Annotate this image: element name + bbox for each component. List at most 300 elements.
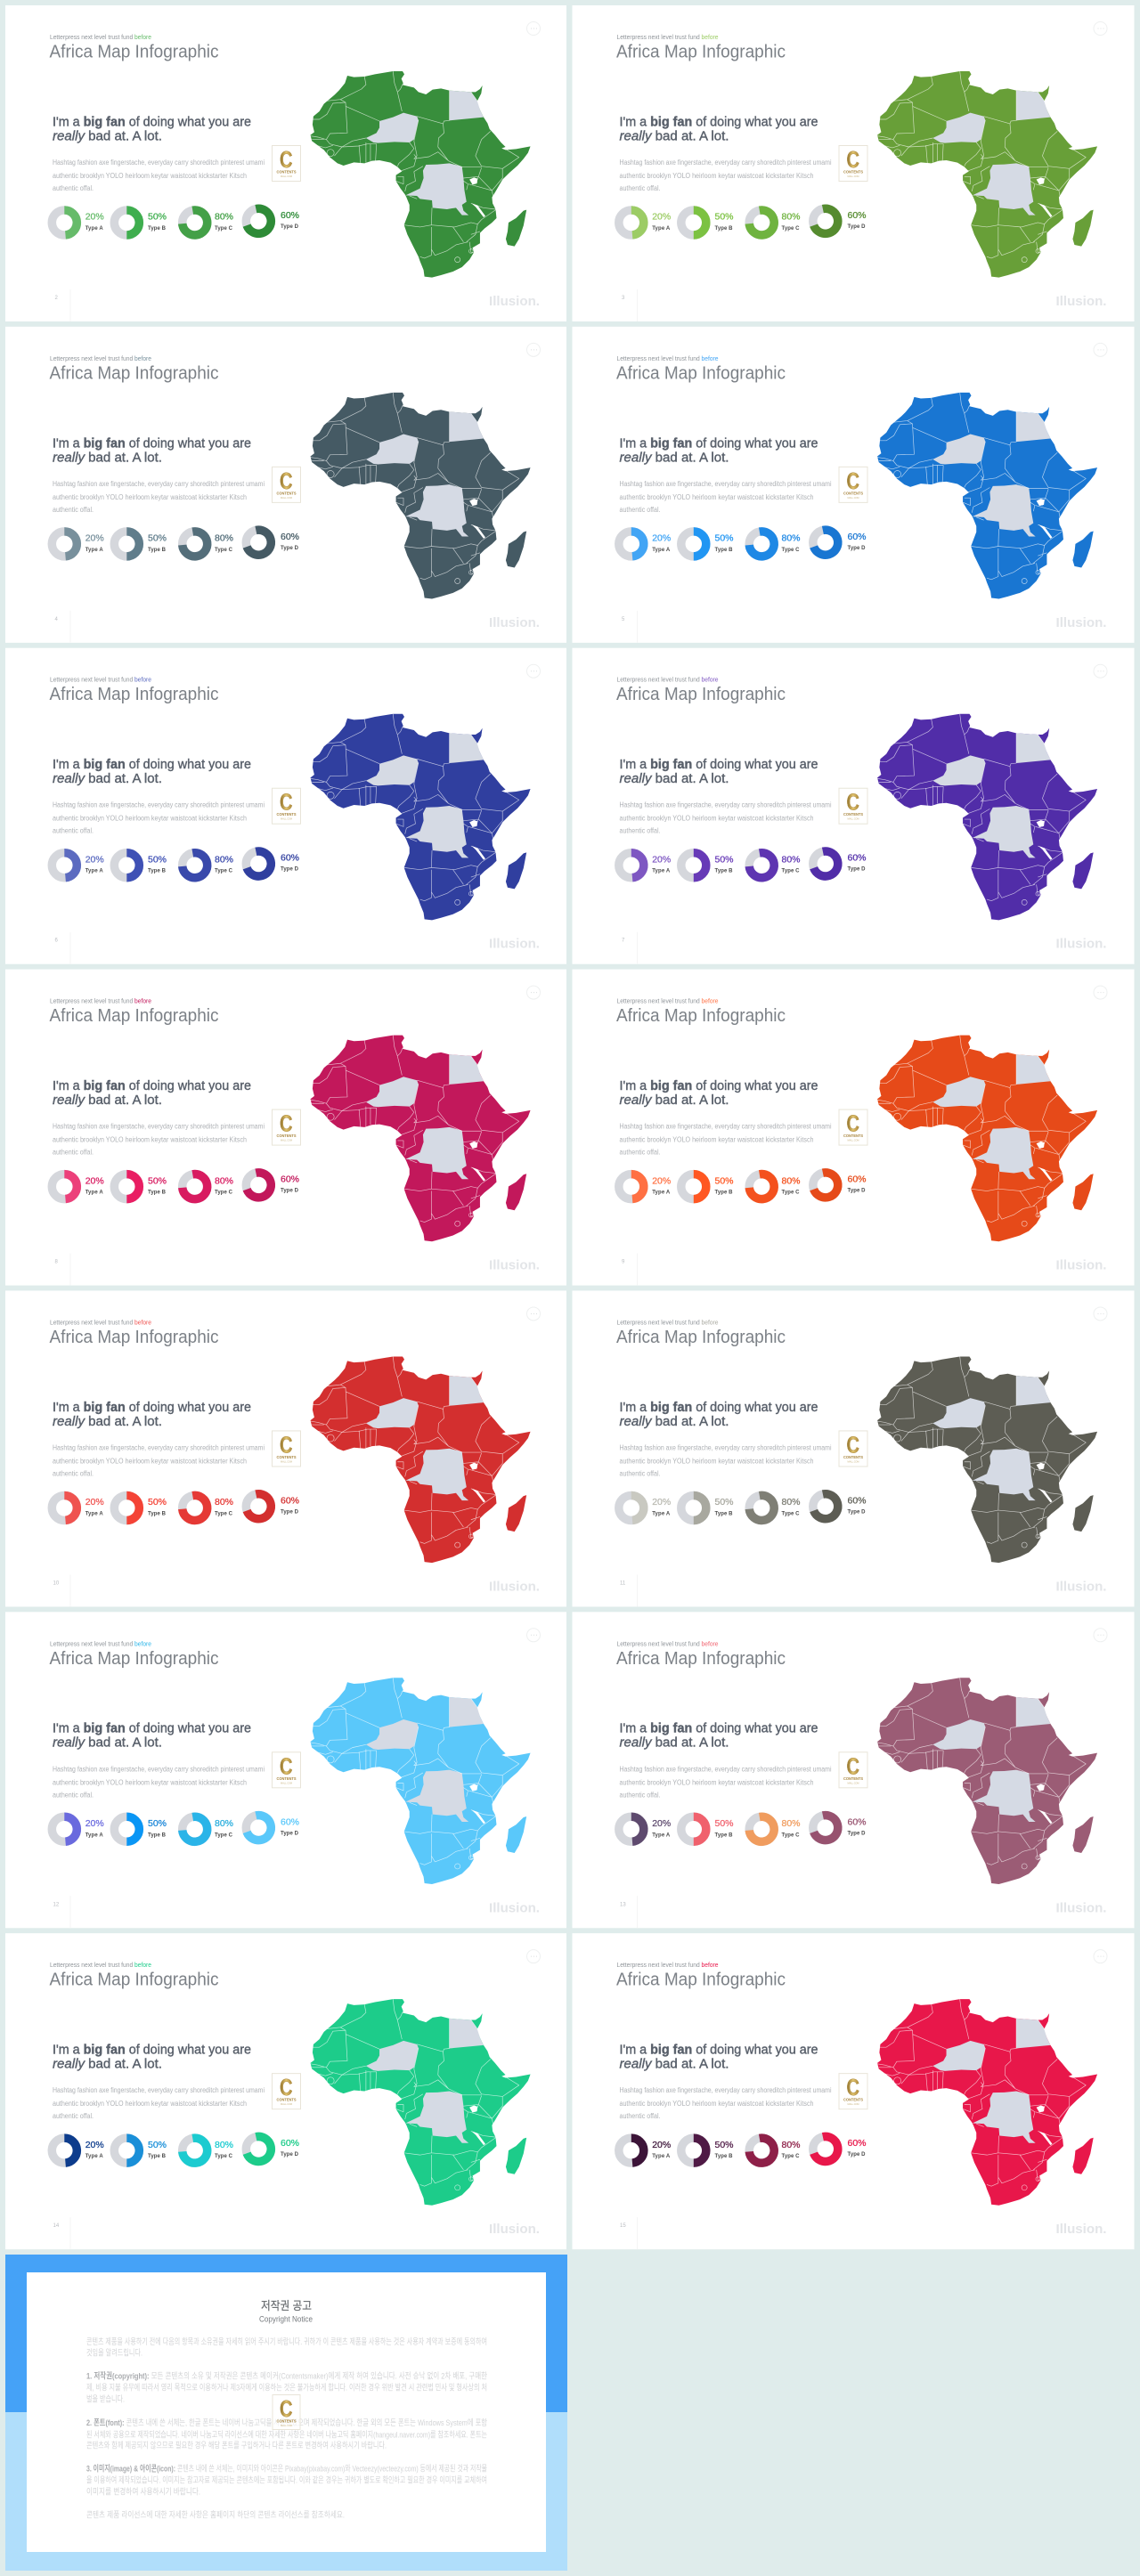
notice section 2 font: 콘텐츠와 함께 제공되지 않으므로 필요한 경우 해당 폰트를 구입하거나 다른 폰트로 변경하여 사용하시기 바랍니다.: [86, 2441, 387, 2451]
title: Africa Map Infographic: [616, 363, 786, 383]
headline: really bad at. A lot.: [620, 1414, 729, 1429]
donut: Type C: 80%: [215, 1175, 233, 1186]
donut: Type D: 60%: [281, 2138, 299, 2149]
donut: Type D: 60%: [281, 1174, 299, 1185]
body text: Hashtag fashion axe fingerstache, everyday carry shoreditch pinterest umami: [53, 1123, 265, 1131]
badge: contents logo: CONTENTS: [276, 1455, 296, 1459]
badge: contents logo: C: [846, 467, 859, 494]
donut: Type A: 20%: [652, 1497, 671, 1507]
badge: contents logo: [839, 146, 867, 182]
donut: Type A: Type A: [652, 1190, 671, 1196]
donut: Type A: [52, 1495, 104, 1520]
donut: Type C: 80%: [215, 2140, 233, 2150]
page number: 13: [620, 1902, 626, 1907]
notice section 1 copyright: 제, 비용 지불 유무에 따라서 영리 목적으로 이용하거나 제3자에게 이용하는 것은 불가능하게 합니다. 이러한 경우 위반 발견 시 관련법 민사 및 형사상의 처: [86, 2382, 487, 2393]
donut: Type B: [114, 210, 167, 235]
notice subheading: Copyright Notice: [259, 2315, 313, 2325]
subtitle: Letterpress next level trust fund before: [616, 354, 718, 362]
map: Africa: [311, 1356, 531, 1563]
body text: [620, 1443, 832, 1477]
badge: contents logo: [273, 2395, 300, 2429]
notice section 3 image and icon: 이미지를 변경하여 사용하시기 바랍니다.: [86, 2486, 200, 2497]
donut: Type D: 60%: [281, 1495, 299, 1506]
body text: authentic brooklyn YOLO heirloom keytar waistcoat kickstarter Kitsch: [620, 1778, 814, 1786]
donut: Type C: 80%: [215, 854, 233, 865]
page number: 5: [622, 617, 625, 622]
donut: Type C: [183, 2138, 233, 2163]
body text: [53, 1443, 265, 1477]
headline: [53, 2043, 251, 2072]
donut: Type D: [246, 208, 299, 233]
badge: contents logo: [839, 2074, 867, 2109]
badge: contents logo: C: [280, 467, 293, 494]
donut: Type C: Type C: [782, 2154, 800, 2159]
donut: Type A: [619, 532, 671, 557]
donut: Type D: Type D: [848, 224, 866, 230]
title: Africa Map Infographic: [50, 1649, 219, 1669]
badge: contents logo: CONTENTS: [276, 2098, 296, 2102]
donut: Type B: 50%: [148, 2140, 167, 2150]
donut: Type A: Type A: [86, 869, 103, 874]
donut: Type B: [681, 1495, 734, 1520]
title: Africa Map Infographic: [50, 363, 219, 383]
panel: slide 12 sky blue: [5, 1612, 566, 1928]
donut: Type C: Type C: [215, 2154, 233, 2159]
badge: contents logo: [273, 1109, 301, 1145]
badge: contents logo: [273, 1752, 301, 1788]
subtitle: Letterpress next level trust fund before: [50, 1639, 151, 1647]
headline: really bad at. A lot.: [620, 1735, 729, 1751]
badge: contents logo: CONTENTS: [276, 812, 296, 817]
panel: slide 14 teal green: [5, 1933, 566, 2249]
headline: [53, 1400, 251, 1429]
donut: Type A: [52, 210, 104, 235]
title: Africa Map Infographic: [50, 1006, 219, 1026]
badge: contents logo: C: [846, 2074, 859, 2101]
badge: contents logo: C: [280, 2395, 293, 2422]
donut: Type C: Type C: [782, 226, 800, 232]
icon: menu circle: [1094, 1307, 1107, 1321]
badge: contents logo: CONTENTS: [276, 1134, 296, 1138]
donut: Type C: [749, 210, 800, 235]
donut: Type A: 20%: [652, 212, 671, 223]
donut: Type A: 20%: [652, 1818, 671, 1829]
donut: Type B: [114, 1816, 167, 1841]
donut: Type C: Type C: [215, 226, 233, 232]
donut: Type C: [749, 853, 800, 878]
subtitle: Letterpress next level trust fund before: [616, 676, 718, 684]
donut: Type B: Type B: [714, 226, 733, 232]
body text: [620, 1765, 832, 1799]
brand: Illusion: Illusion.: [1056, 294, 1106, 309]
brand: Illusion: Illusion.: [1056, 937, 1106, 952]
donut: Type C: [183, 532, 233, 557]
body text: [53, 2086, 265, 2120]
body text: Hashtag fashion axe fingerstache, everyday carry shoreditch pinterest umami: [620, 801, 832, 809]
subtitle: Letterpress next level trust fund before: [616, 1639, 718, 1647]
icon: menu circle: [527, 343, 540, 356]
title: Africa Map Infographic: [50, 1971, 219, 1990]
notice section 3 image and icon: 을 이용하여 제작되었습니다. 이미지는 참고자료 제공되는 콘텐츠에는 포함됩니다. 이와 같은 경우는 귀하가 별도로 확인하고 필요한 경우 이미지를 교체하여: [86, 2475, 487, 2486]
donut: Type D: Type D: [281, 867, 299, 873]
headline: [620, 1078, 818, 1108]
headline: I'm a big fan of doing what you are: [620, 1400, 818, 1415]
headline: really bad at. A lot.: [53, 1735, 162, 1751]
brand: Illusion: Illusion.: [1056, 1579, 1106, 1594]
brand: Illusion: Illusion.: [489, 1579, 540, 1594]
panel: slide 3 light green: [572, 5, 1135, 321]
donut: Type D: [813, 2136, 866, 2161]
donut: Type B: [681, 1174, 734, 1199]
icon: menu circle: [1094, 664, 1107, 678]
badge: contents logo: CONTENTS: [276, 2418, 296, 2424]
map: Africa: [311, 393, 531, 599]
donut: Type A: [619, 1495, 671, 1520]
brand: Illusion: Illusion.: [489, 2222, 540, 2237]
subtitle: Letterpress next level trust fund before: [50, 33, 151, 41]
brand: Illusion: Illusion.: [489, 294, 540, 309]
donut: Type B: [681, 1816, 734, 1841]
donut: Type C: 80%: [215, 533, 233, 544]
badge: contents logo: C: [280, 1431, 293, 1458]
panel: slide 15 crimson: [572, 1933, 1135, 2249]
badge: contents logo: [839, 788, 867, 824]
donut: Type D: [246, 2136, 299, 2161]
body text: authentic brooklyn YOLO heirloom keytar waistcoat kickstarter Kitsch: [53, 1778, 247, 1786]
badge: contents logo: CONTENTS: [843, 812, 863, 817]
headline: I'm a big fan of doing what you are: [53, 2043, 251, 2058]
badge: contents logo: CONTENTS: [843, 491, 863, 495]
donut: Type A: 20%: [86, 212, 104, 223]
badge: contents logo: MALL.COM: [281, 2424, 292, 2427]
body text: authentic brooklyn YOLO heirloom keytar waistcoat kickstarter Kitsch: [53, 1136, 247, 1144]
panel: slide 7 purple: [572, 648, 1135, 964]
body text: authentic offal.: [53, 184, 94, 192]
headline: I'm a big fan of doing what you are: [53, 757, 251, 772]
body text: authentic brooklyn YOLO heirloom keytar waistcoat kickstarter Kitsch: [620, 815, 814, 823]
donut: Type D: Type D: [281, 1189, 299, 1194]
donut: Type A: Type A: [86, 1511, 103, 1516]
donut: Type D: Type D: [848, 867, 866, 873]
body text: authentic offal.: [620, 827, 661, 835]
donut: Type D: [246, 1816, 299, 1841]
subtitle: Letterpress next level trust fund before: [616, 33, 718, 41]
badge: contents logo: MALL.COM: [281, 1459, 292, 1463]
icon: menu circle: [527, 1950, 540, 1963]
notice closing line: 콘텐츠 제품 라이선스에 대한 자세한 사항은 홈페이지 하단의 콘텐츠 라이선스를 참조하세요.: [86, 2510, 345, 2521]
donut: Type C: [749, 1174, 800, 1199]
donut: Type D: [813, 530, 866, 555]
page number: 7: [622, 939, 625, 944]
donut: Type B: 50%: [714, 1818, 734, 1829]
subtitle: Letterpress next level trust fund before: [50, 1961, 151, 1969]
badge: contents logo: MALL.COM: [281, 1139, 292, 1142]
page number: 2: [55, 296, 59, 301]
badge: contents logo: C: [846, 1752, 859, 1779]
notice section 3 image and icon: 3. 이미지(image) & 아이콘(icon): 콘텐츠 내에 쓴 서체는, 이미지와 아이콘은 Pixabay(pixabay.com)와 Vecteezy(vecteezy.com) 등에서 제공된 것과 저작물: [86, 2464, 487, 2474]
headline: really bad at. A lot.: [53, 771, 162, 786]
icon: menu circle: [527, 21, 540, 36]
brand: Illusion: Illusion.: [1056, 615, 1106, 630]
donut: Type A: [52, 1174, 104, 1199]
body text: [53, 801, 265, 835]
donut: Type C: [183, 853, 233, 878]
donut: Type A: 20%: [652, 854, 671, 865]
donut: Type C: 80%: [782, 533, 800, 544]
donut: Type A: Type A: [652, 1832, 671, 1838]
donut: Type C: Type C: [215, 1832, 233, 1838]
map: Africa: [877, 1036, 1097, 1241]
page number: 8: [55, 1260, 59, 1265]
donut: Type C: 80%: [782, 1818, 800, 1829]
subtitle: Letterpress next level trust fund before: [616, 1318, 718, 1326]
donut: Type A: [52, 853, 104, 878]
page number: 15: [620, 2223, 626, 2229]
headline: [620, 2043, 818, 2072]
title: Africa Map Infographic: [616, 1971, 786, 1990]
body text: [53, 1765, 265, 1799]
badge: contents logo: CONTENTS: [843, 2098, 863, 2102]
map: Africa: [311, 71, 531, 278]
notice card: [27, 2272, 546, 2552]
donut: Type B: Type B: [714, 548, 733, 553]
map: Africa: [877, 1356, 1097, 1563]
icon: menu circle: [527, 664, 540, 678]
donut: Type A: 20%: [86, 1818, 104, 1829]
body text: [620, 801, 832, 835]
badge: contents logo: [839, 1109, 867, 1145]
donut: Type B: Type B: [148, 548, 167, 553]
headline: really bad at. A lot.: [620, 1093, 729, 1108]
donut: Type A: [52, 532, 104, 557]
body text: [620, 2086, 832, 2120]
donut: Type C: [183, 1816, 233, 1841]
badge: contents logo: C: [280, 146, 293, 173]
body text: Hashtag fashion axe fingerstache, everyday carry shoreditch pinterest umami: [620, 480, 832, 488]
headline: I'm a big fan of doing what you are: [620, 757, 818, 772]
headline: [53, 1721, 251, 1751]
donut: Type D: [813, 208, 866, 233]
body text: authentic brooklyn YOLO heirloom keytar waistcoat kickstarter Kitsch: [53, 815, 247, 823]
headline: really bad at. A lot.: [53, 1093, 162, 1108]
donut: Type B: [681, 853, 734, 878]
headline: I'm a big fan of doing what you are: [53, 1400, 251, 1415]
donut: Type A: Type A: [652, 1511, 671, 1516]
donut: Type D: 60%: [281, 1816, 299, 1827]
headline: [53, 1078, 251, 1108]
badge: contents logo: [273, 467, 301, 502]
badge: contents logo: MALL.COM: [848, 1781, 859, 1784]
body text: authentic brooklyn YOLO heirloom keytar waistcoat kickstarter Kitsch: [620, 493, 814, 501]
badge: contents logo: [839, 1431, 867, 1467]
donut: Type D: [246, 1173, 299, 1198]
badge: contents logo: C: [280, 789, 293, 816]
donut: Type C: 80%: [215, 212, 233, 223]
donut: Type D: Type D: [848, 1509, 866, 1515]
badge: contents logo: MALL.COM: [848, 817, 859, 821]
body text: Hashtag fashion axe fingerstache, everyday carry shoreditch pinterest umami: [53, 158, 265, 167]
badge: contents logo: [273, 788, 301, 824]
title: Africa Map Infographic: [50, 1328, 219, 1347]
badge: contents logo: C: [846, 1431, 859, 1458]
headline: I'm a big fan of doing what you are: [620, 2043, 818, 2058]
badge: contents logo: MALL.COM: [281, 2102, 292, 2106]
donut: Type A: [619, 1816, 671, 1841]
headline: really bad at. A lot.: [53, 450, 162, 465]
title: Africa Map Infographic: [616, 43, 786, 62]
donut: Type B: 50%: [714, 212, 734, 223]
donut: Type B: 50%: [148, 212, 167, 223]
donut: Type C: Type C: [782, 1190, 800, 1196]
donut: Type C: [749, 1816, 800, 1841]
map: Africa: [877, 393, 1097, 599]
donut: Type D: Type D: [848, 2152, 866, 2158]
panel: copyright notice: [5, 2255, 567, 2571]
donut: Type C: Type C: [215, 869, 233, 874]
headline: [620, 1400, 818, 1429]
page number: 4: [55, 617, 59, 622]
donut: Type B: [114, 1495, 167, 1520]
donut: Type D: [813, 851, 866, 876]
badge: contents logo: C: [846, 146, 859, 173]
badge: contents logo: MALL.COM: [281, 175, 292, 178]
title: Africa Map Infographic: [616, 1328, 786, 1347]
donut: Type D: Type D: [281, 1509, 299, 1515]
body text: Hashtag fashion axe fingerstache, everyday carry shoreditch pinterest umami: [53, 801, 265, 809]
donut: Type C: Type C: [215, 1190, 233, 1196]
donut: Type C: Type C: [782, 548, 800, 553]
donut: Type C: 80%: [782, 1175, 800, 1186]
headline: I'm a big fan of doing what you are: [53, 1078, 251, 1093]
body text: authentic offal.: [53, 827, 94, 835]
donut: Type A: [619, 853, 671, 878]
headline: [53, 435, 251, 465]
donut: Type C: 80%: [782, 854, 800, 865]
donut: Type B: 50%: [714, 533, 734, 544]
page number: 10: [53, 1581, 60, 1586]
icon: menu circle: [1094, 986, 1107, 999]
body text: Hashtag fashion axe fingerstache, everyday carry shoreditch pinterest umami: [620, 2086, 832, 2094]
donut: Type A: Type A: [86, 226, 103, 232]
body text: authentic brooklyn YOLO heirloom keytar waistcoat kickstarter Kitsch: [620, 1457, 814, 1465]
donut: Type A: Type A: [652, 2154, 671, 2159]
headline: I'm a big fan of doing what you are: [620, 1721, 818, 1736]
headline: I'm a big fan of doing what you are: [620, 435, 818, 451]
donut: Type D: 60%: [848, 2138, 866, 2149]
body text: authentic offal.: [620, 2112, 661, 2120]
body text: authentic offal.: [620, 1791, 661, 1799]
badge: contents logo: CONTENTS: [843, 1134, 863, 1138]
panel: slide 9 orange: [572, 970, 1135, 1286]
badge: contents logo: [273, 1431, 301, 1467]
donut: Type C: Type C: [215, 548, 233, 553]
donut: Type A: 20%: [86, 1175, 104, 1186]
badge: contents logo: [839, 1752, 867, 1788]
brand: Illusion: Illusion.: [489, 1900, 540, 1915]
body text: [620, 158, 832, 192]
donut: Type D: Type D: [848, 1831, 866, 1836]
donut: Type A: [619, 1174, 671, 1199]
donut: Type B: Type B: [714, 1190, 733, 1196]
body text: authentic offal.: [53, 1469, 94, 1477]
badge: contents logo: MALL.COM: [848, 496, 859, 500]
donut: Type D: [813, 1494, 866, 1519]
donut: Type A: Type A: [86, 1190, 103, 1196]
badge: contents logo: [273, 146, 301, 182]
map: Africa: [877, 1999, 1097, 2206]
donut: Type A: [52, 2138, 104, 2163]
donut: Type A: 20%: [86, 533, 104, 544]
headline: [620, 1721, 818, 1751]
brand: Illusion: Illusion.: [489, 937, 540, 952]
headline: I'm a big fan of doing what you are: [53, 1721, 251, 1736]
donut: Type C: [183, 210, 233, 235]
map: Africa: [877, 71, 1097, 278]
donut: Type D: [246, 851, 299, 876]
donut: Type D: [813, 1173, 866, 1198]
notice heading: 저작권 공고: [261, 2299, 312, 2312]
body text: Hashtag fashion axe fingerstache, everyday carry shoreditch pinterest umami: [620, 158, 832, 167]
body text: authentic offal.: [53, 506, 94, 514]
donut: Type B: 50%: [714, 2140, 734, 2150]
donut: Type D: 60%: [281, 853, 299, 864]
page number: 9: [622, 1260, 625, 1265]
title: Africa Map Infographic: [50, 685, 219, 704]
headline: [53, 114, 251, 143]
body text: authentic offal.: [620, 506, 661, 514]
donut: Type B: Type B: [714, 1832, 733, 1838]
donut: Type A: Type A: [652, 226, 671, 232]
donut: Type D: 60%: [848, 1174, 866, 1185]
donut: Type D: Type D: [281, 224, 299, 230]
badge: contents logo: MALL.COM: [281, 1781, 292, 1784]
body text: authentic offal.: [53, 1149, 94, 1157]
page number: 12: [53, 1902, 60, 1907]
donut: Type A: 20%: [652, 2140, 671, 2150]
headline: really bad at. A lot.: [53, 2057, 162, 2072]
body text: [53, 158, 265, 192]
headline: I'm a big fan of doing what you are: [53, 114, 251, 129]
map: Africa: [877, 1678, 1097, 1884]
body text: Hashtag fashion axe fingerstache, everyday carry shoreditch pinterest umami: [53, 2086, 265, 2094]
badge: contents logo: C: [846, 1110, 859, 1137]
donut: Type B: [114, 1174, 167, 1199]
headline: really bad at. A lot.: [53, 1414, 162, 1429]
headline: [53, 757, 251, 786]
notice section 1 copyright: [86, 2370, 487, 2405]
donut: Type D: [813, 1816, 866, 1841]
body text: [620, 480, 832, 514]
donut: Type D: 60%: [848, 532, 866, 542]
page number: 11: [620, 1581, 626, 1586]
donut: Type D: 60%: [848, 1495, 866, 1506]
notice section 2 font: 된 서체와 공용으로 제작되었습니다. 네이버 나눔고딕 라이선스에 대한 자세한 사항은 네이버 나눔고딕 홈페이지(hangeul.naver.com)를 참조하세요. 폰트는: [86, 2429, 487, 2440]
donut: Type A: 20%: [86, 2140, 104, 2150]
donut: Type B: Type B: [148, 1190, 167, 1196]
donut: Type C: 80%: [215, 1497, 233, 1507]
donut: Type A: 20%: [652, 1175, 671, 1186]
page number: 14: [53, 2223, 60, 2229]
badge: contents logo: [839, 467, 867, 502]
body text: Hashtag fashion axe fingerstache, everyday carry shoreditch pinterest umami: [53, 480, 265, 488]
donut: Type B: Type B: [148, 2154, 167, 2159]
page number: 3: [622, 296, 625, 301]
title: Africa Map Infographic: [616, 685, 786, 704]
donut: Type D: Type D: [848, 1189, 866, 1194]
badge: contents logo: CONTENTS: [843, 1776, 863, 1781]
donut: Type A: 20%: [86, 1497, 104, 1507]
donut: Type C: Type C: [782, 1511, 800, 1516]
